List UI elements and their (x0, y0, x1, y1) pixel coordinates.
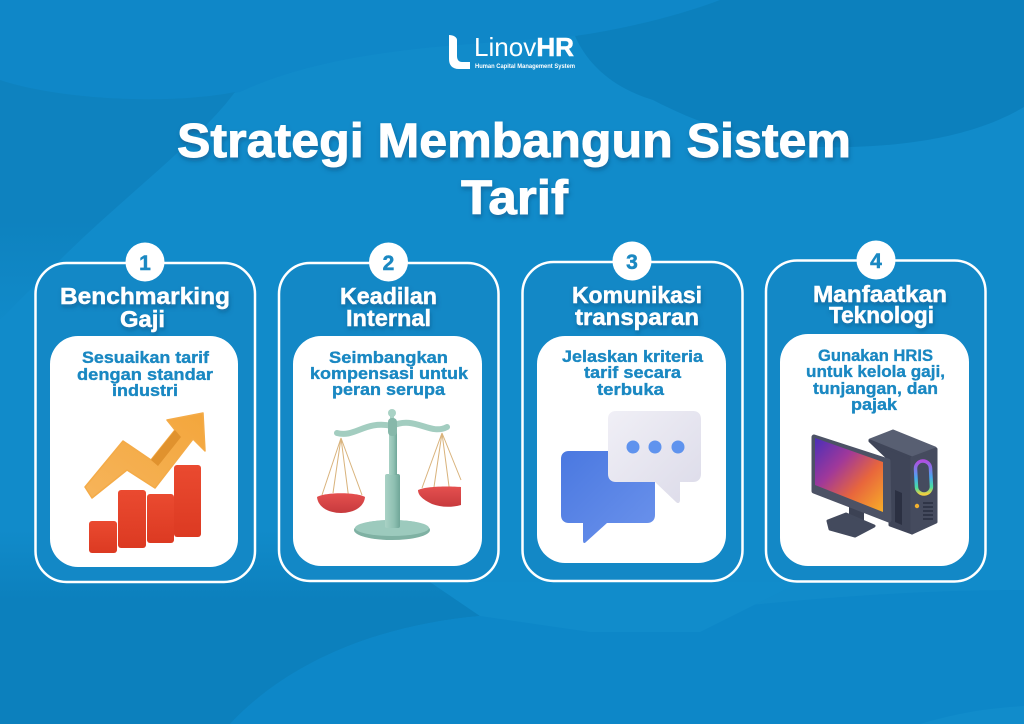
logo: LinovHR (449, 32, 575, 70)
description: Gunakan HRIS (818, 346, 933, 365)
description (310, 348, 469, 399)
description: Jelaskan kriteria (562, 347, 704, 366)
description (77, 348, 213, 400)
description: pajak (851, 395, 898, 414)
logo tagline: Human Capital Management System (475, 64, 575, 70)
heading (813, 281, 947, 328)
number badge 1 (126, 242, 164, 282)
description: peran serupa (332, 380, 446, 399)
card outline (766, 260, 986, 582)
number badge 4 (856, 240, 896, 280)
white content panel (50, 336, 238, 567)
description (562, 347, 704, 399)
description: dengan standar (77, 365, 213, 384)
description: terbuka (597, 380, 665, 399)
icon: chat bubbles (561, 411, 701, 543)
description: kompensasi untuk (310, 364, 469, 383)
panel: Keadilan Internal (279, 242, 498, 581)
heading: Komunikasi (572, 282, 702, 308)
description: Seimbangkan (329, 348, 448, 367)
number badge 1: 1 (139, 252, 151, 275)
card outline (36, 263, 255, 582)
number badge 3: 3 (626, 251, 638, 274)
number badge 2: 2 (383, 252, 394, 275)
panel: Benchmarking Gaji (36, 242, 255, 582)
white content panel (537, 336, 726, 563)
description: tunjangan, dan (813, 379, 938, 398)
description: tarif secara (584, 363, 682, 382)
heading: Keadilan (340, 283, 437, 309)
title: Tarif (461, 172, 569, 225)
description: untuk kelola gaji, (806, 362, 945, 381)
icon: rising bar chart with arrow (85, 413, 205, 553)
heading: Gaji (120, 306, 165, 332)
heading: transparan (575, 304, 699, 330)
heading: Teknologi (829, 302, 934, 328)
heading: Manfaatkan (813, 281, 947, 307)
card outline (522, 262, 742, 581)
white content panel (293, 336, 482, 566)
heading: Benchmarking (60, 283, 230, 309)
icon: balance scale (317, 409, 461, 540)
number badge 2 (369, 242, 408, 282)
heading: Internal (346, 305, 431, 331)
title: Strategi Membangun Sistem (177, 115, 851, 168)
card outline (279, 263, 498, 581)
icon: desktop computer (814, 431, 936, 536)
heading (572, 282, 702, 330)
description (806, 346, 945, 414)
number badge 3 (612, 242, 652, 280)
logo wordmark: LinovHR (474, 32, 574, 62)
panel: Komunikasi transparan (522, 242, 742, 581)
title (177, 115, 851, 225)
number badge 4: 4 (870, 250, 882, 273)
logo mark (449, 35, 470, 69)
description: industri (112, 381, 178, 400)
white content panel (780, 334, 969, 566)
heading (340, 283, 437, 331)
heading (60, 283, 230, 332)
description: Sesuaikan tarif (82, 348, 209, 367)
panel: Manfaatkan Teknologi (766, 240, 986, 582)
